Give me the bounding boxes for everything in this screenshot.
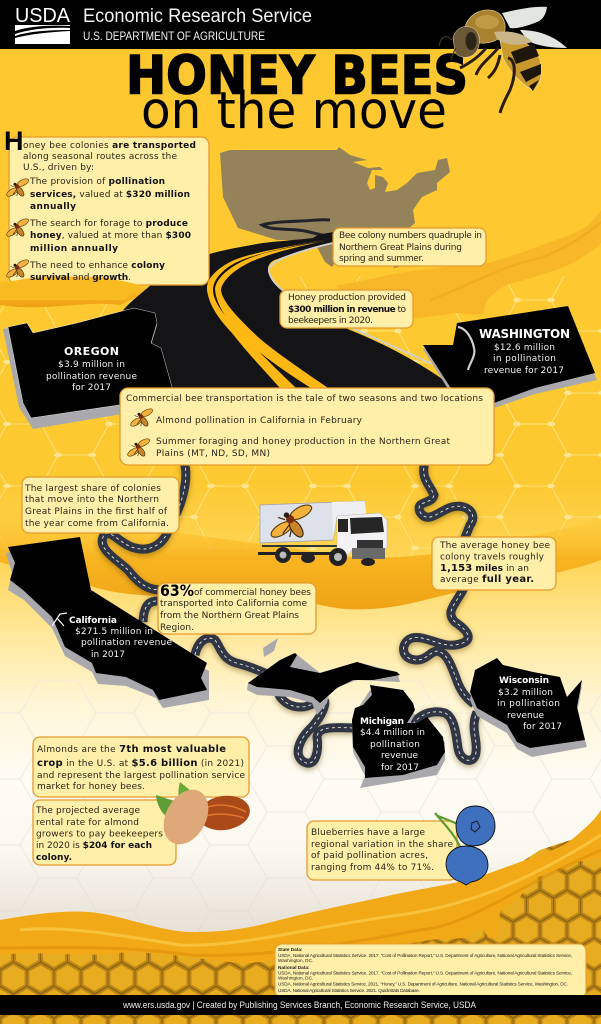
callout: honey revenue: Honey production provided xyxy=(288,293,406,303)
state: Oregon: pollination revenue xyxy=(46,372,137,382)
bullet: pollination services: The provision of pollination xyxy=(29,177,165,187)
state: Michigan: revenue xyxy=(381,751,418,761)
callout: miles traveled: average full year. xyxy=(440,574,534,585)
road: far winding tip xyxy=(262,220,330,236)
panel: intro: U.S., driven by: xyxy=(23,163,94,173)
panel: two seasons: Almond pollination in California in February xyxy=(156,416,363,426)
callout: 63 percent: transported into California come xyxy=(160,599,307,609)
callout: miles traveled: The average honey bee xyxy=(439,541,550,551)
state: Wisconsin: for 2017 xyxy=(523,722,562,732)
callout: miles traveled: 1,153 miles in an xyxy=(440,563,529,574)
callout: rental rate xyxy=(33,800,176,865)
state: California xyxy=(6,537,209,708)
background: grey speckle xyxy=(0,850,601,940)
callout: almonds value: Almonds are the 7th most valuable xyxy=(37,744,226,755)
callout: almonds value: and represent the largest pollination service xyxy=(37,771,245,781)
callout: 63 percent: Region. xyxy=(160,623,194,633)
state: Oregon: $3.9 million in xyxy=(58,360,125,370)
callout: 63 percent: of commercial honey bees xyxy=(194,588,311,598)
panel: two seasons: Summer foraging and honey production in the Northern Great xyxy=(156,437,450,447)
winding road: Upper Michigan to Michigan xyxy=(278,693,354,763)
panel: intro: survival and growth. xyxy=(30,273,131,283)
callout: honey revenue: $300 million in revenue to xyxy=(288,305,406,315)
background: pale honeycomb lines xyxy=(0,680,601,940)
panel: intro: along seasonal routes across the xyxy=(23,152,177,162)
honey: mid-page wave xyxy=(0,505,601,609)
truck bee logo xyxy=(269,502,314,540)
callout: blueberries: Blueberries have a large xyxy=(311,828,425,838)
panel: two seasons: Commercial bee transportation is the tale of two seasons and two locations xyxy=(126,394,483,404)
callout: rental rate: growers to pay beekeepers xyxy=(36,830,163,840)
road: double yellow centre lines xyxy=(207,238,333,388)
state: Upper Michigan xyxy=(247,653,400,715)
callout: almonds value xyxy=(33,737,249,797)
callout: largest share: Great Plains in the first half of xyxy=(25,507,168,517)
panel: sources: USDA, National Agricultural Statistics Service. 2021. “Honey,” U.S. Department of Agriculture, National Agricultural Statistics Service, Washington, DC. xyxy=(278,982,568,986)
callout: blueberries: regional variation in the share xyxy=(311,840,453,850)
icon: large honey bee xyxy=(439,7,567,113)
honey: bottom flow xyxy=(0,810,601,963)
department name: U.S. DEPARTMENT OF AGRICULTURE xyxy=(83,31,265,43)
icon: bee almond xyxy=(129,407,154,428)
callout: almonds value: market for honey bees. xyxy=(37,782,145,792)
icon: almonds xyxy=(155,782,252,852)
island: Isle Royale xyxy=(263,638,278,657)
panel: sources: USDA, National Agricultural Statistics Service. 2021. QuickStats Database. xyxy=(278,988,420,993)
winding road: right upper xyxy=(419,462,473,540)
panel: sources xyxy=(275,944,586,998)
callout: rental rate: in 2020 is $204 for each xyxy=(36,841,152,851)
panel: sources: USDA, National Agricultural Statistics Service. 2017. “Cost of Pollination Report,” U.S. Department of Agriculture, National Agricultural Statistics Service, xyxy=(278,953,572,958)
USDA logo xyxy=(15,5,71,44)
state: Washington: $12.6 million xyxy=(494,343,555,353)
title xyxy=(126,46,468,141)
honey: upper right flow xyxy=(335,210,601,320)
callout: 63 percent: from the Northern Great Plains xyxy=(160,611,299,621)
state: California: in 2017 xyxy=(91,650,125,660)
winding road: top left xyxy=(102,462,186,590)
panel: two seasons: Plains (MT, ND, SD, MN) xyxy=(156,449,270,459)
agency name: Economic Research Service xyxy=(83,6,312,27)
state: Wisconsin: revenue xyxy=(507,711,544,721)
state: Michigan: Michigan xyxy=(360,717,404,727)
header bar xyxy=(0,0,601,49)
callout: rental rate: The projected average xyxy=(35,806,140,816)
state: Washington xyxy=(423,306,597,408)
state: Washington: WASHINGTON xyxy=(479,327,570,341)
winding road: from box to California xyxy=(143,601,162,622)
intro text: oney bee colonies are transported xyxy=(23,141,196,151)
state: Wisconsin: Wisconsin xyxy=(499,676,549,686)
bullet: honey production: The search for forage to produce xyxy=(29,219,188,229)
state: Wisconsin: $3.2 million xyxy=(498,688,553,698)
callout: largest share xyxy=(22,477,179,533)
callout: miles traveled xyxy=(432,537,556,590)
title: HONEY BEES xyxy=(126,46,468,106)
callout: 63 percent xyxy=(158,581,316,634)
state: California: $271.5 million in xyxy=(75,627,153,637)
state: California: pollination revenue xyxy=(81,638,172,648)
state: Oregon: for 2017 xyxy=(72,383,111,393)
background: upper right honeycomb lines xyxy=(300,276,601,300)
callout: honey revenue: beekeepers in 2020. xyxy=(288,316,373,326)
state: Oregon xyxy=(3,308,175,429)
icon: bee summer xyxy=(126,437,151,458)
road edge line xyxy=(269,243,432,364)
callout: rental rate: rental rate for almond xyxy=(36,818,139,828)
state: Michigan: pollination xyxy=(370,740,420,750)
panel: intro xyxy=(0,126,209,300)
panel: sources: USDA, National Agricultural Statistics Service. 2017. “Cost of Pollination Report,” U.S. Department of Agriculture, National Agricultural Statistics Service, xyxy=(278,970,572,976)
state: Michigan xyxy=(352,685,445,788)
panel: sources: Washington, DC. xyxy=(278,976,313,980)
icon: bullet bee one xyxy=(5,177,30,198)
map: United States xyxy=(220,147,450,268)
state: Wisconsin xyxy=(470,658,587,757)
drop cap H: H xyxy=(4,126,24,156)
winding road: Michigan to Wisconsin xyxy=(413,712,477,760)
honey: upper left pool xyxy=(0,276,150,307)
callout: largest share: the year come from California. xyxy=(25,519,169,529)
panel: sources: National Data: xyxy=(278,965,310,970)
icon: blueberries xyxy=(435,806,495,885)
panel: two seasons xyxy=(120,388,494,465)
winding road: California to Upper Michigan xyxy=(195,638,272,676)
panel: sources: State Data: xyxy=(278,947,303,952)
callout: almonds value: crop in the U.S. at $5.6 billion (in 2021) xyxy=(37,758,244,769)
callout: rental rate: colony. xyxy=(36,853,72,863)
title: on the move xyxy=(141,82,447,141)
callout: blueberries: ranging from 44% to 71%. xyxy=(311,863,434,873)
honey: overlap on intro panel base xyxy=(0,277,140,300)
callout: colony numbers xyxy=(333,228,486,266)
callout: blueberries xyxy=(307,821,457,880)
winding road: right lower xyxy=(404,588,474,704)
state: Washington: in pollination xyxy=(493,354,556,364)
icon: bullet bee two xyxy=(5,217,30,238)
bullet: survival: The need to enhance colony xyxy=(29,261,165,271)
callout: 63 percent: 63% xyxy=(160,581,194,600)
state: Wisconsin: in pollination xyxy=(497,699,560,709)
callout: honey revenue xyxy=(280,290,413,328)
background: yellow honeycomb lines xyxy=(0,300,601,560)
footer bar xyxy=(0,995,601,1015)
callout: miles traveled: colony travels roughly xyxy=(440,552,545,562)
icon: bullet bee three xyxy=(5,258,30,279)
panel: intro: million annually xyxy=(30,244,118,254)
callout: colony numbers: Northern Great Plains during xyxy=(339,243,462,253)
USDA logo: USDA xyxy=(15,5,71,27)
panel: sources: Washington, DC. xyxy=(278,958,313,963)
honeycomb base xyxy=(0,830,601,1024)
callout: largest share: The largest share of colonies xyxy=(24,484,161,494)
state: Washington: revenue for 2017 xyxy=(484,366,564,376)
callout: blueberries: of paid pollination acres, xyxy=(311,851,428,861)
road: main highway xyxy=(122,220,470,400)
callout: largest share: that move into the Northern xyxy=(25,495,159,505)
state: California: California xyxy=(69,616,117,626)
panel: intro: services, valued at $320 million xyxy=(30,190,190,200)
state: Michigan: for 2017 xyxy=(381,763,419,773)
truck xyxy=(258,501,387,566)
footer text: www.ers.usda.gov | Created by Publishing Services Branch, Economic Research Service, USDA xyxy=(122,1000,477,1011)
state: Oregon: OREGON xyxy=(64,345,119,358)
panel: intro: annually xyxy=(30,202,76,212)
callout: colony numbers: Bee colony numbers quadruple in xyxy=(339,231,482,241)
panel: intro: honey, valued at more than $300 xyxy=(30,231,191,241)
callout: colony numbers: spring and summer. xyxy=(339,254,424,264)
state: Michigan: $4.4 million in xyxy=(360,728,425,738)
